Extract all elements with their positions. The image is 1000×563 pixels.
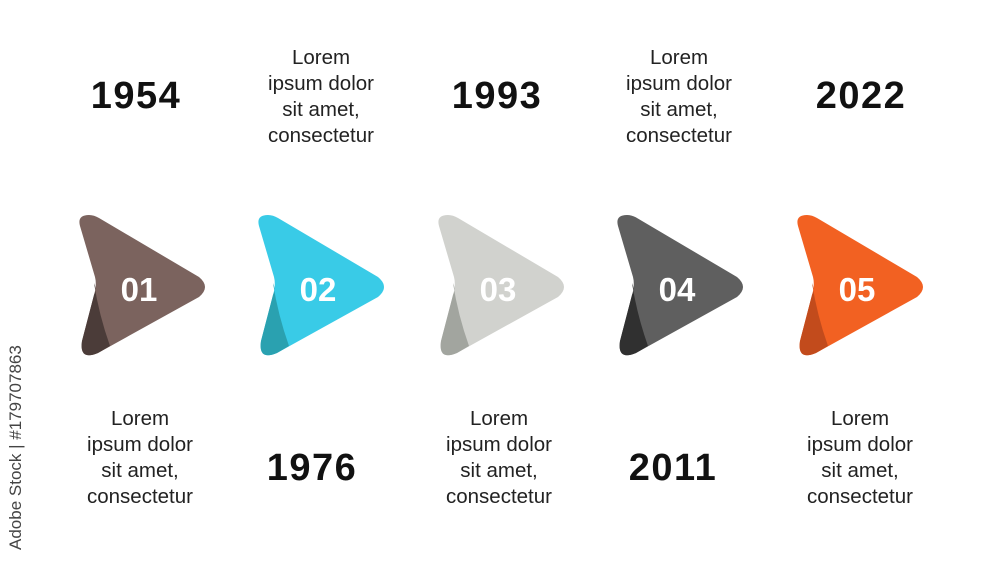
arrow 02	[258, 215, 384, 355]
text 1 bottom: consectetur	[87, 485, 193, 508]
text 1 bottom: ipsum dolor	[87, 433, 193, 456]
text 4 top: consectetur	[626, 124, 732, 147]
text 3 bottom: Lorem	[470, 407, 528, 430]
arrow 05	[797, 215, 923, 355]
text 5 bottom: sit amet,	[821, 459, 899, 482]
text 5 bottom: Lorem	[831, 407, 889, 430]
text 3 bottom: consectetur	[446, 485, 552, 508]
year 2011: 2011	[629, 447, 717, 489]
text 2 top: consectetur	[268, 124, 374, 147]
arrow 04	[617, 215, 743, 355]
text 2 top: Lorem	[292, 46, 350, 69]
year 2022: 2022	[816, 75, 906, 117]
year 1993: 1993	[452, 75, 542, 117]
text 5 bottom: consectetur	[807, 485, 913, 508]
arrow 01: 01	[121, 271, 157, 308]
arrow 02: 02	[300, 271, 336, 308]
text 4 top: Lorem	[650, 46, 708, 69]
text 2 top	[268, 46, 374, 147]
arrow 03	[438, 215, 564, 355]
text 1 bottom: Lorem	[111, 407, 169, 430]
text 2 top: sit amet,	[282, 98, 360, 121]
text 1 bottom: sit amet,	[101, 459, 179, 482]
text 4 top	[626, 46, 732, 147]
text 4 top: sit amet,	[640, 98, 718, 121]
text 3 bottom: ipsum dolor	[446, 433, 552, 456]
text 1 bottom	[87, 407, 193, 508]
arrow 01	[79, 215, 205, 355]
text 4 top: ipsum dolor	[626, 72, 732, 95]
text 3 bottom	[446, 407, 552, 508]
arrow 03: 03	[480, 271, 516, 308]
text 5 bottom	[807, 407, 913, 508]
side watermark text: Adobe Stock | #179707863	[6, 345, 25, 550]
year 1954: 1954	[91, 75, 181, 117]
year 1976: 1976	[267, 447, 357, 489]
text 2 top: ipsum dolor	[268, 72, 374, 95]
text 3 bottom: sit amet,	[460, 459, 538, 482]
arrow 04: 04	[659, 271, 696, 308]
text 5 bottom: ipsum dolor	[807, 433, 913, 456]
arrow 05: 05	[839, 271, 875, 308]
